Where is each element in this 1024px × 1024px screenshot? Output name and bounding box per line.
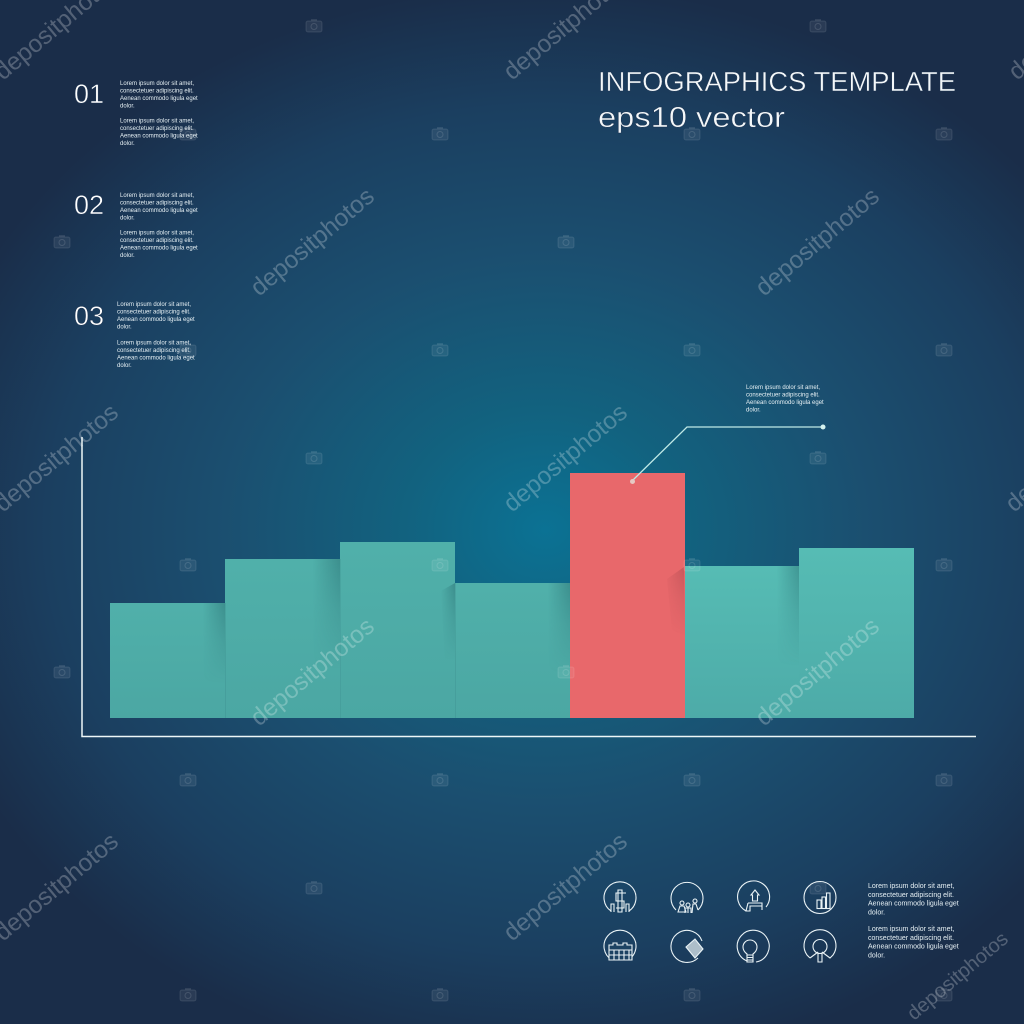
watermarks: depositphotos [246, 613, 380, 732]
section 02: consectetuer adipiscing elit. [120, 238, 194, 244]
bottom text block: Lorem ipsum dolor sit amet, [868, 926, 954, 933]
icon: magnifying glass [804, 930, 836, 962]
section 01 [74, 79, 198, 147]
section 01: Lorem ipsum dolor sit amet, [120, 118, 194, 124]
bottom text block: consectetuer adipiscing elit. [868, 892, 954, 899]
section 02: Aenean commodo ligula eget [120, 208, 198, 214]
callout text: dolor. [746, 408, 761, 414]
section 02: Lorem ipsum dolor sit amet, [120, 230, 194, 236]
icon: people group [671, 882, 703, 913]
icon: bar chart [804, 882, 836, 914]
watermarks: depositphotos [499, 828, 633, 947]
bar 2 [225, 559, 340, 718]
callout text: Aenean commodo ligula eget [746, 400, 824, 406]
section 03: Aenean commodo ligula eget [117, 317, 195, 323]
bottom text block [868, 883, 959, 959]
section 01: consectetuer adipiscing elit. [120, 126, 194, 132]
callout text: Lorem ipsum dolor sit amet, [746, 385, 820, 391]
section 02: dolor. [120, 253, 135, 259]
section 02: 02 [74, 190, 104, 220]
section 01: Aenean commodo ligula eget [120, 96, 198, 102]
icon: monument on a platform [738, 881, 770, 911]
icon: light bulb [737, 930, 769, 962]
callout text: consectetuer adipiscing elit. [746, 392, 820, 398]
bar 7 [799, 548, 914, 718]
bottom text block: Lorem ipsum dolor sit amet, [868, 883, 954, 890]
bottom text block: Aenean commodo ligula eget [868, 944, 959, 951]
watermarks: depositphotos [903, 928, 1013, 1024]
section 01: consectetuer adipiscing elit. [120, 88, 194, 94]
section 03: 03 [74, 301, 104, 331]
section 03: consectetuer adipiscing elit. [117, 348, 191, 354]
callout text [746, 385, 824, 414]
section 03: dolor. [117, 324, 132, 330]
watermarks: depositphotos [246, 183, 380, 302]
section 01: Aenean commodo ligula eget [120, 134, 198, 140]
section 03: dolor. [117, 363, 132, 369]
section 01: 01 [74, 79, 104, 109]
bottom icon set [604, 881, 836, 962]
icon: dollar sign [604, 882, 636, 912]
section 01: Lorem ipsum dolor sit amet, [120, 81, 194, 87]
bar 3 [340, 542, 455, 718]
icon: notepad [671, 930, 703, 962]
section 03: Aenean commodo ligula eget [117, 356, 195, 362]
section 01: dolor. [120, 141, 135, 147]
section 02: Lorem ipsum dolor sit amet, [120, 193, 194, 199]
section 01: dolor. [120, 104, 135, 110]
watermarks: depositphotos [751, 183, 885, 302]
bar 6 [685, 566, 799, 718]
title [598, 66, 956, 134]
section 02: consectetuer adipiscing elit. [120, 200, 194, 206]
bottom text block: Aenean commodo ligula eget [868, 901, 959, 908]
section 03: Lorem ipsum dolor sit amet, [117, 340, 191, 346]
bar 4 [455, 583, 570, 718]
icon: calendar [604, 930, 636, 960]
title: INFOGRAPHICS TEMPLATE [598, 66, 956, 97]
watermarks: depositphotos [499, 399, 633, 518]
section 02 [74, 190, 198, 259]
bottom text block: dolor. [868, 952, 885, 959]
section 02: dolor. [120, 216, 135, 222]
axes [82, 437, 976, 736]
section 03 [74, 301, 195, 369]
section 02: Aenean commodo ligula eget [120, 246, 198, 252]
bottom text block: consectetuer adipiscing elit. [868, 935, 954, 942]
section 03: Lorem ipsum dolor sit amet, [117, 302, 191, 308]
chart: bar chart with axes [82, 437, 976, 736]
callout leader line [630, 424, 826, 484]
bottom text block: dolor. [868, 909, 885, 916]
watermarks: depositphotos [751, 613, 885, 732]
section 03: consectetuer adipiscing elit. [117, 310, 191, 316]
bar 1 [110, 603, 225, 718]
bar 5: highlighted red [570, 473, 685, 718]
title: eps10 vector [598, 102, 785, 134]
